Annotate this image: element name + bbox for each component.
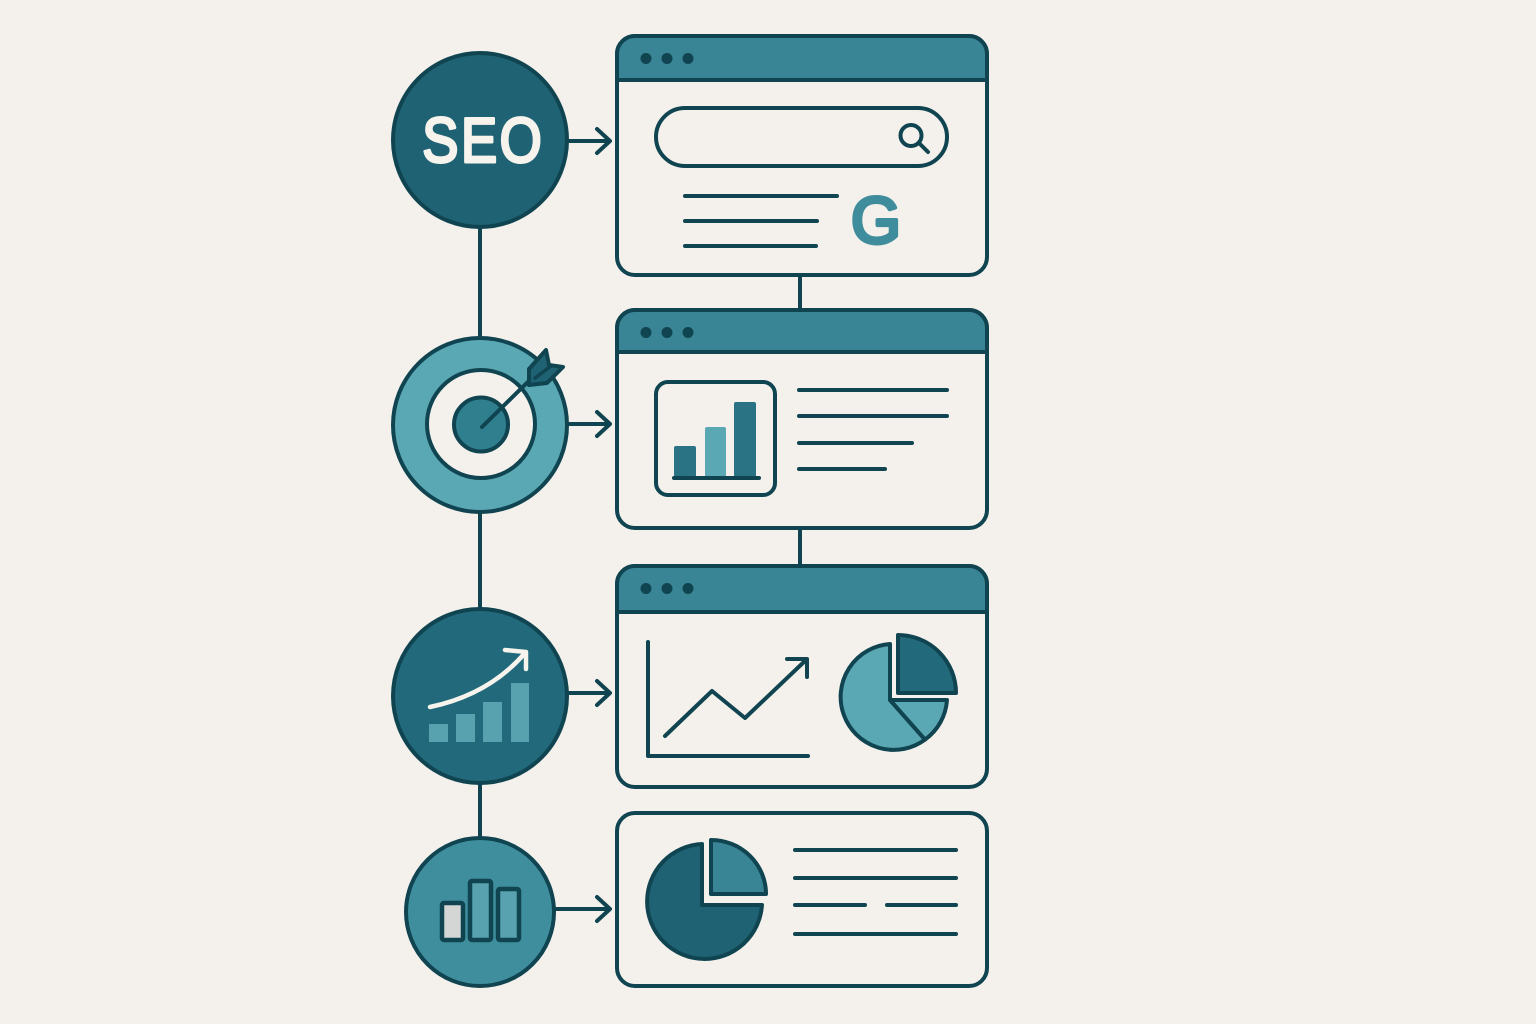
arrow: growth to analytics window [568, 681, 610, 705]
text lines [799, 390, 947, 469]
left timeline connectors [478, 225, 482, 840]
arrow: SEO to search window [568, 129, 610, 153]
icon: magnifier [900, 125, 928, 152]
target inner ring [427, 370, 535, 478]
text lines [685, 196, 837, 246]
pie chart [841, 635, 956, 750]
step 2: target circle [393, 338, 567, 512]
icon: G logo: G [851, 183, 901, 257]
arrow: target to chart window [568, 412, 610, 436]
step 1: SEO circle [393, 53, 567, 227]
window connectors [798, 274, 802, 568]
step 3: growth circle [393, 609, 567, 783]
panel: bar chart window [617, 310, 987, 528]
target bullseye [454, 398, 508, 452]
step 4: report circle [406, 838, 554, 986]
report bars [442, 881, 519, 940]
panel: summary card [617, 813, 987, 986]
SEO label: SEO [422, 106, 542, 176]
panel: search window [617, 36, 987, 275]
window dots [640, 583, 694, 594]
window dots [640, 327, 694, 338]
bar chart card [656, 382, 775, 495]
dart fletching [529, 350, 563, 385]
window dots [640, 53, 694, 64]
dart shaft [482, 372, 538, 427]
arrow: report to summary panel [555, 897, 610, 921]
search bar [656, 108, 947, 166]
window header bar [617, 566, 987, 612]
growth bars [429, 683, 529, 742]
window header bar [617, 310, 987, 352]
line chart [648, 642, 808, 756]
text lines [795, 850, 956, 934]
panel: analytics window [617, 566, 987, 787]
pie chart [647, 840, 766, 959]
window header bar [617, 36, 987, 80]
growth arrow [430, 650, 526, 707]
